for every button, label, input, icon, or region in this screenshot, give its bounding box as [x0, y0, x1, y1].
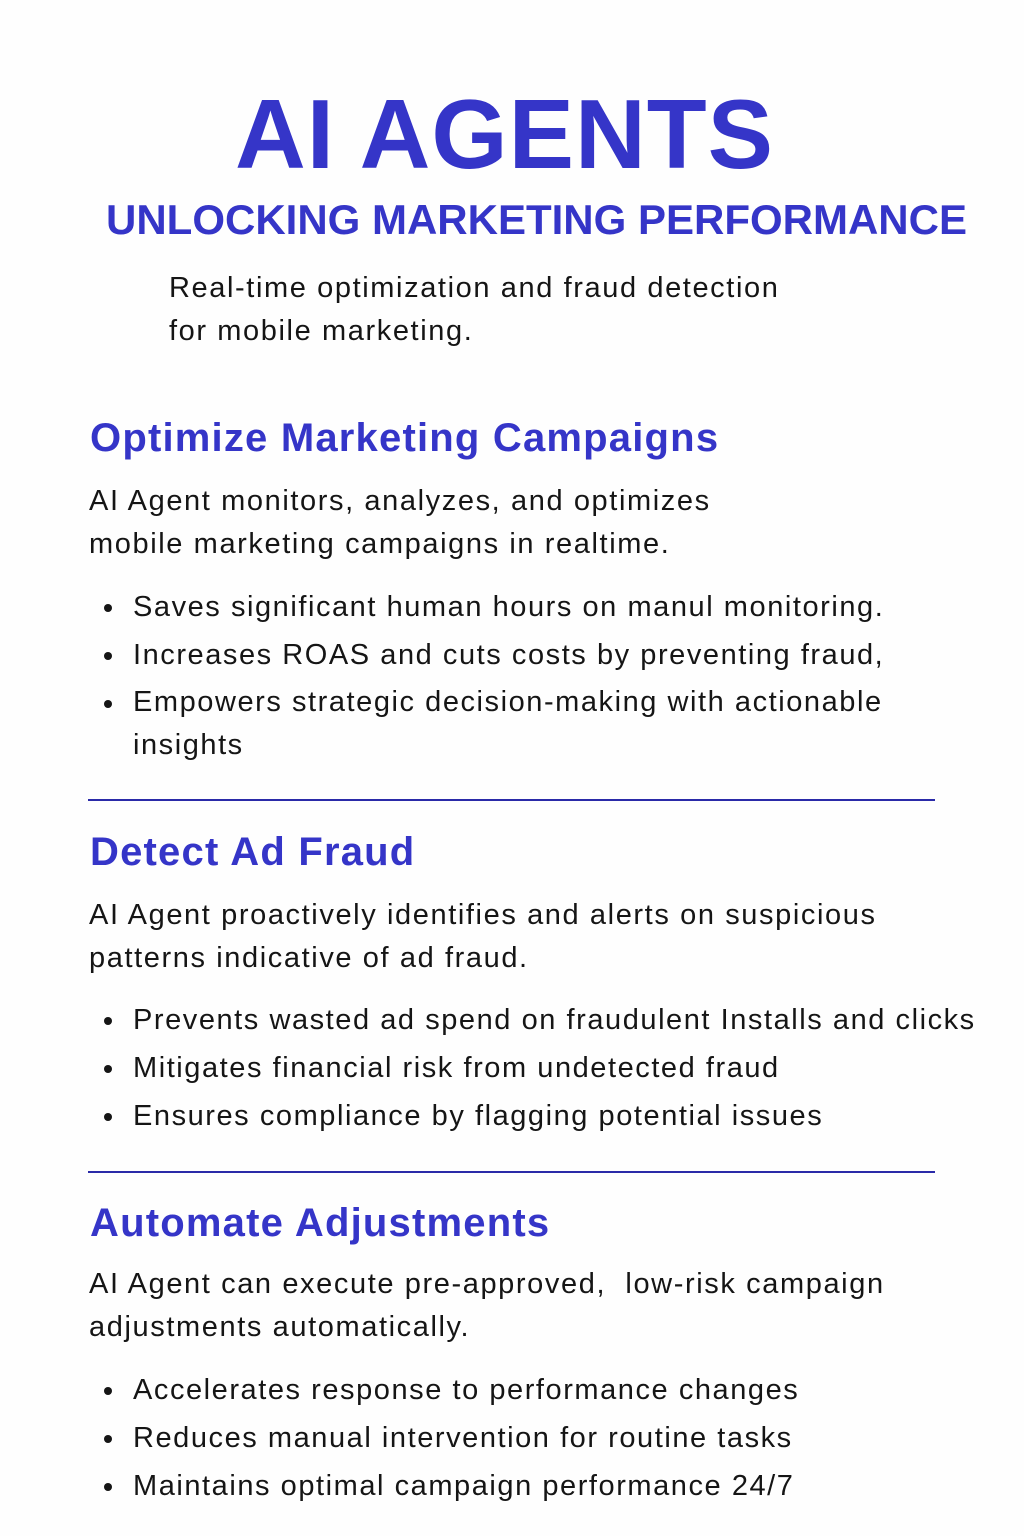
bullets: automate: [104, 1374, 799, 1502]
bullets: fraud: Mitigates financial risk from undetected fraud: [133, 1052, 780, 1084]
bullets: optimize: Increases ROAS and cuts costs by preventing fraud,: [133, 639, 884, 671]
bullets: automate: Maintains optimal campaign performance 24/7: [133, 1470, 794, 1502]
subtitle: UNLOCKING MARKETING PERFORMANCE: [106, 196, 967, 243]
bullets: optimize: Empowers strategic decision-making with actionable: [133, 686, 883, 718]
description: fraud: AI Agent proactively identifies and alerts on suspicious: [89, 899, 877, 931]
bullets: fraud: Prevents wasted ad spend on fraudulent Installs and clicks: [133, 1004, 976, 1036]
section: fraud: [89, 830, 976, 1132]
intro text: [169, 272, 779, 347]
description: fraud: patterns indicative of ad fraud.: [89, 942, 529, 974]
description: optimize: AI Agent monitors, analyzes, and optimizes: [89, 485, 711, 517]
description: optimize: [89, 485, 711, 560]
description: automate: [89, 1268, 885, 1343]
section: automate: [89, 1201, 885, 1502]
description: optimize: mobile marketing campaigns in realtime.: [89, 528, 670, 560]
intro text: Real-time optimization and fraud detection: [169, 272, 779, 304]
bullets: fraud: Ensures compliance by flagging potential issues: [133, 1100, 823, 1132]
title: AI AGENTS: [235, 79, 774, 189]
heading: fraud: Detect Ad Fraud: [90, 830, 415, 874]
bullets: optimize: Saves significant human hours on manul monitoring.: [133, 591, 884, 623]
bullets: automate: Reduces manual intervention for routine tasks: [133, 1422, 793, 1454]
bullets: optimize: insights: [133, 729, 244, 761]
section: optimize: [89, 416, 884, 761]
bullets: fraud: [104, 1004, 976, 1132]
intro text: for mobile marketing.: [169, 315, 473, 347]
bullets: automate: Accelerates response to performance changes: [133, 1374, 799, 1406]
bullets: optimize: [104, 591, 884, 761]
description: fraud: [89, 899, 877, 974]
description: automate: adjustments automatically.: [89, 1311, 470, 1343]
heading: automate: Automate Adjustments: [90, 1201, 550, 1245]
heading: optimize: Optimize Marketing Campaigns: [90, 416, 719, 460]
description: automate: AI Agent can execute pre-approved, low-risk campaign: [89, 1268, 885, 1300]
